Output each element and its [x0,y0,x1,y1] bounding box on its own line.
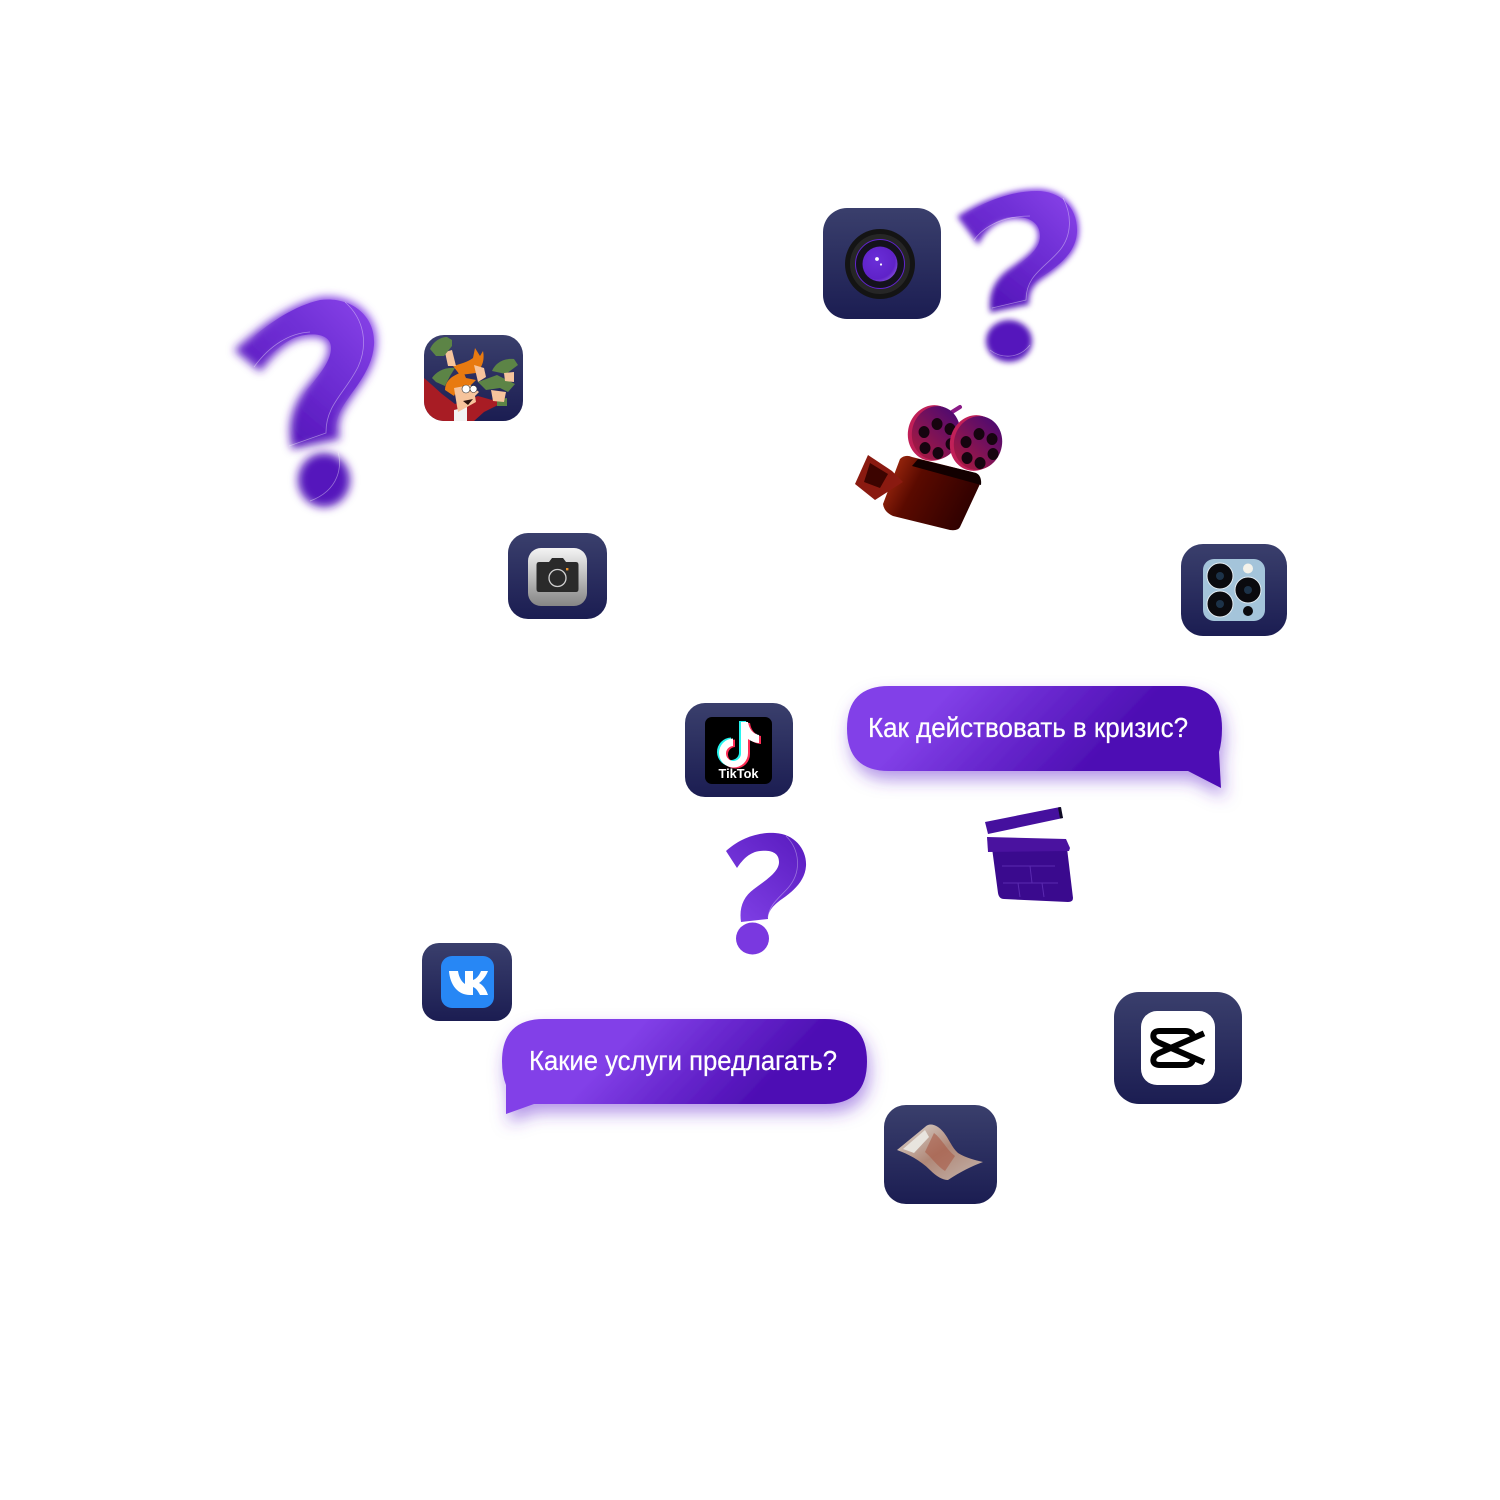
icon tile: lens [823,208,941,319]
camera body top [912,459,981,485]
camera handle [952,407,960,412]
icon tile: iPhone cameras [1181,544,1287,636]
icon tile: banknote [884,1105,997,1204]
icon: clapperboard [985,807,1073,902]
icon part: eyes [462,385,477,393]
question mark: middle [726,833,806,954]
icon part: back face [474,365,486,382]
icon part: mouth [463,399,473,405]
icon part: arm up [445,350,456,366]
icon part: cash right [478,375,515,392]
left reel [902,399,966,467]
question mark: large left [238,299,374,507]
icon part: hands [491,372,514,402]
icon part: front hair [445,371,476,396]
icon part: cash right top [492,359,518,374]
icon tile: Fry with money [424,335,523,421]
icon tile: camera app [508,533,607,619]
icon tile: CapCut [1114,992,1242,1104]
icon part: front face [454,385,479,412]
icon: film camera [855,399,1008,530]
bubble text: Какие услуги предлагать? [529,1045,837,1076]
icon part: red jacket [424,378,500,421]
TikTok wordmark: TikTok [718,766,759,781]
icon tile: VK [422,943,512,1021]
speech bubble: services [502,1019,867,1114]
icon part: cash top left [430,337,452,356]
TikTok note [717,721,761,768]
icon part: white shirt [454,407,467,421]
icon tile: TikTok [685,703,793,797]
icon part: cash far right bottom [497,398,507,406]
camera lens hood [855,455,903,500]
bubble text: Как действовать в кризис? [868,712,1188,743]
icon part: orange hair back [453,348,484,375]
right reel [944,409,1008,477]
icon part: cash left [432,368,455,386]
camera lens hole [864,463,888,488]
speech bubble: crisis [847,686,1222,788]
camera body [883,456,980,530]
question mark: top right [960,191,1077,362]
